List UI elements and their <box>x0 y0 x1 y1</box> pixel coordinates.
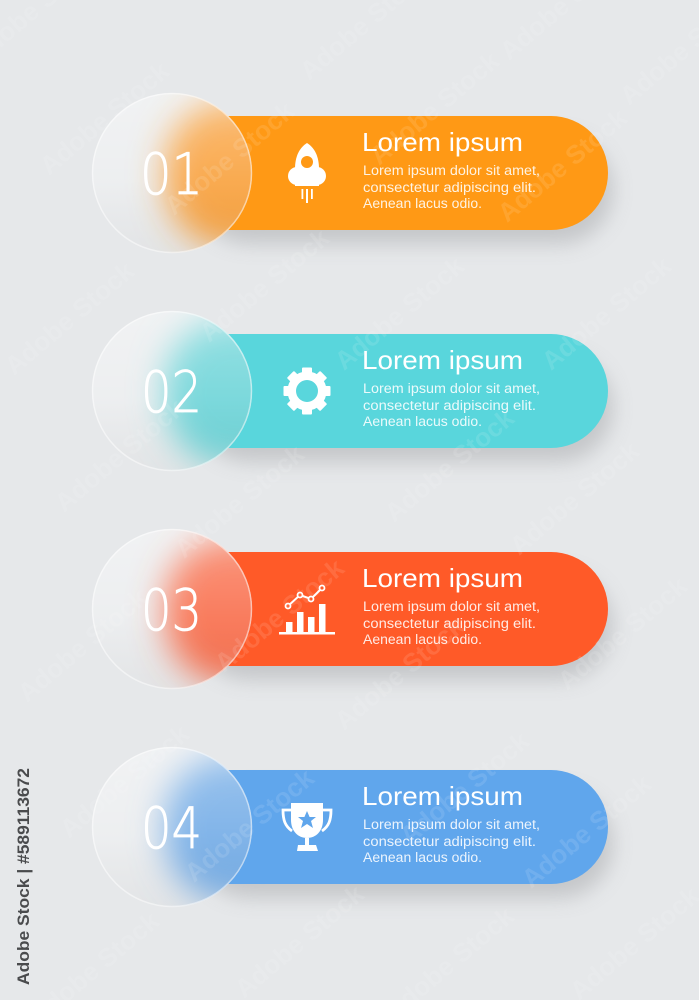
heading 4: Lorem ipsum <box>362 781 523 811</box>
text block 1: Aenean lacus odio. <box>363 196 482 211</box>
text block 3: Aenean lacus odio. <box>363 632 482 647</box>
number 01: 01 <box>140 142 203 208</box>
watermark pattern: Adobe Stock <box>169 438 310 564</box>
watermark pattern: Adobe Stock <box>209 552 350 678</box>
watermark pattern: Adobe Stock <box>379 402 520 528</box>
text block 4: Aenean lacus odio. <box>363 850 482 865</box>
text block 2: Lorem ipsum dolor sit amet, <box>363 381 540 396</box>
heading 2: Lorem ipsum <box>362 345 523 375</box>
watermark pattern: Adobe Stock <box>329 610 470 736</box>
text block 3: Lorem ipsum dolor sit amet, <box>363 599 540 614</box>
bar shadow 3 <box>195 572 613 680</box>
text block 3 <box>363 599 540 647</box>
number 03: 03 <box>141 578 202 644</box>
watermark pattern: Adobe Stock <box>229 878 370 1000</box>
glass circle 2 <box>98 312 252 470</box>
text block 1: consectetur adipiscing elit. <box>363 180 536 195</box>
panel: step 4 <box>90 744 613 910</box>
watermark pattern: Adobe Stock <box>329 250 470 376</box>
watermark pattern: Adobe Stock <box>504 435 645 561</box>
icon: trophy <box>283 803 331 851</box>
bar 1 <box>172 116 608 230</box>
watermark pattern: Adobe Stock <box>12 582 153 708</box>
watermark pattern: Adobe Stock <box>54 718 195 844</box>
glass circle 4 <box>98 748 252 906</box>
glass circle 3 <box>98 530 252 688</box>
text block 4: consectetur adipiscing elit. <box>363 834 536 849</box>
text block 2: consectetur adipiscing elit. <box>363 398 536 413</box>
watermark pattern: Adobe Stock <box>492 102 633 228</box>
text block 4 <box>363 817 540 865</box>
watermark pattern: Adobe Stock <box>516 768 657 894</box>
watermark pattern: Adobe Stock <box>34 55 175 181</box>
panel: step 3 <box>90 526 613 692</box>
watermark pattern: Adobe Stock <box>0 255 140 381</box>
glass circle 1 <box>98 94 252 252</box>
icon: rocket <box>288 143 326 203</box>
watermark pattern: Adobe Stock <box>159 95 300 221</box>
bar 2 <box>172 334 608 448</box>
panel: step 2 <box>90 308 613 474</box>
watermark pattern: Adobe Stock <box>179 762 320 888</box>
infographic canvas <box>17 93 620 985</box>
watermark pattern: Adobe Stock <box>394 725 535 851</box>
bar 3 <box>172 552 608 666</box>
watermark pattern: Adobe Stock <box>364 45 505 171</box>
bar 4 <box>172 770 608 884</box>
panel: step 1 <box>90 90 613 256</box>
text block 2: Aenean lacus odio. <box>363 414 482 429</box>
text block 1 <box>363 163 540 211</box>
watermark pattern: Adobe Stock <box>536 250 677 376</box>
watermark pattern: Adobe Stock <box>49 392 190 518</box>
number 04: 04 <box>141 796 202 862</box>
stock id label: Adobe Stock | #589113672 <box>14 768 33 985</box>
number 02: 02 <box>141 360 202 426</box>
watermark pattern: Adobe Stock <box>552 570 693 696</box>
icon: gear <box>284 368 330 414</box>
text block 3: consectetur adipiscing elit. <box>363 616 536 631</box>
text block 4: Lorem ipsum dolor sit amet, <box>363 817 540 832</box>
bar shadow 1 <box>195 136 613 244</box>
text block 2 <box>363 381 540 429</box>
bar shadow 2 <box>195 354 613 462</box>
text block 1: Lorem ipsum dolor sit amet, <box>363 163 540 178</box>
icon: bar chart <box>279 586 335 634</box>
watermark pattern: Adobe Stock <box>194 222 335 348</box>
heading 3: Lorem ipsum <box>362 563 523 593</box>
bar shadow 4 <box>195 790 613 898</box>
heading 1: Lorem ipsum <box>362 127 523 157</box>
